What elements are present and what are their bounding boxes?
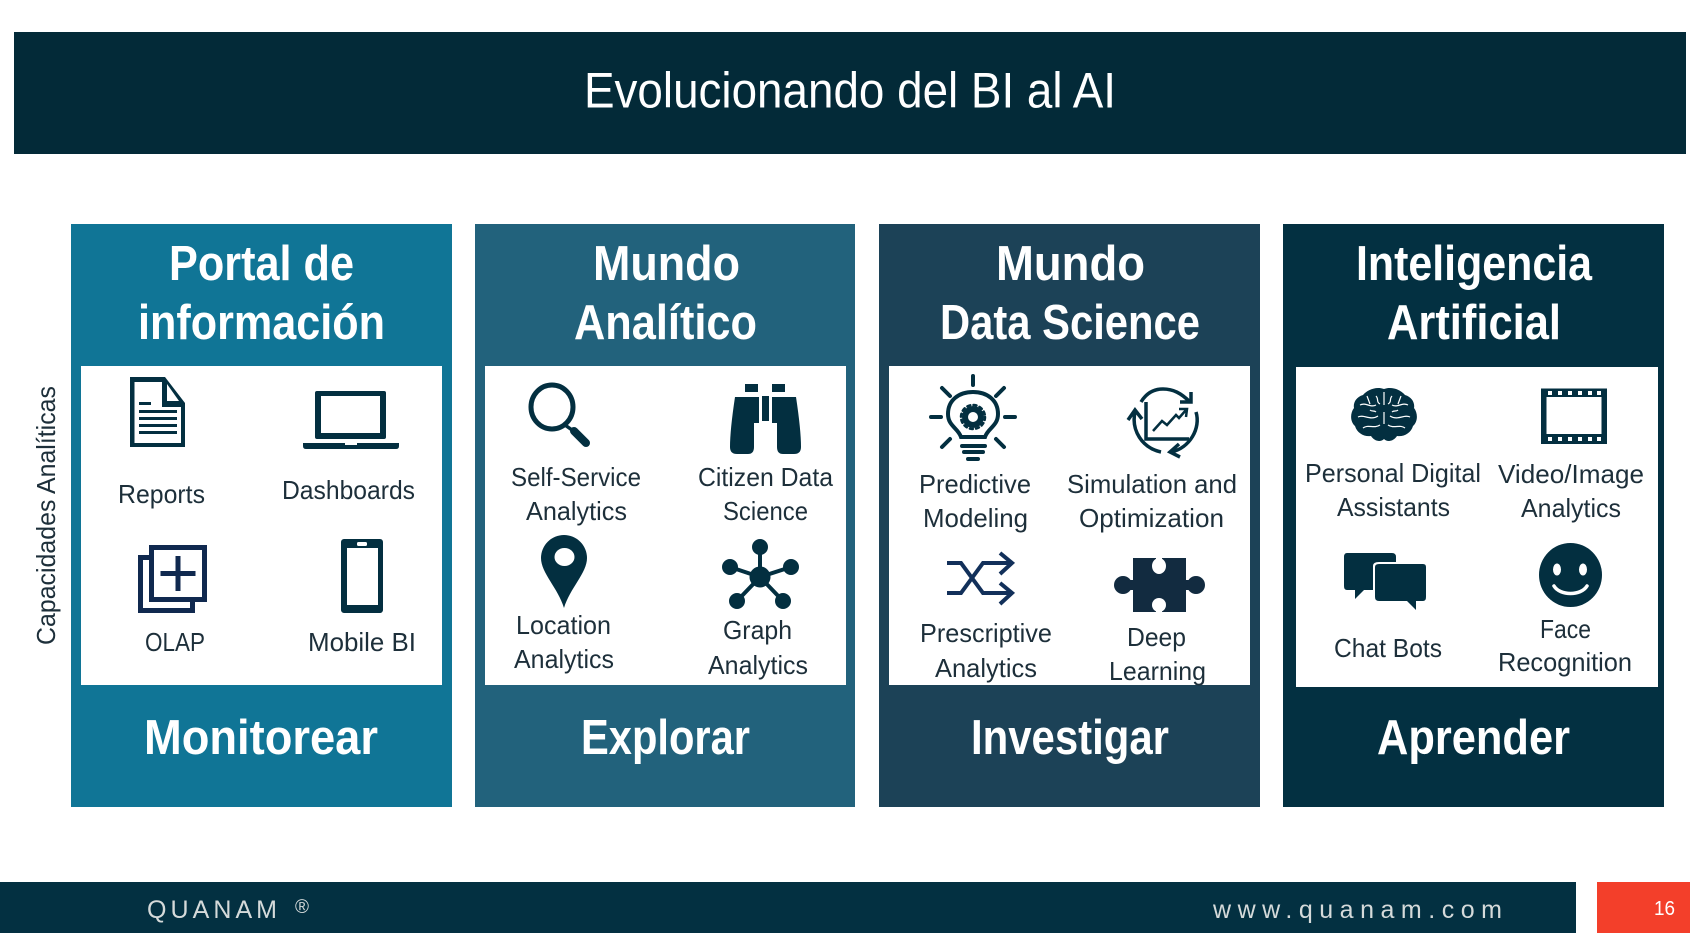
label: Analytics — [935, 653, 1037, 683]
label — [919, 469, 1031, 533]
heading — [574, 237, 757, 350]
label — [698, 462, 834, 526]
icon: chat bubbles — [1344, 553, 1428, 612]
icon: shuffle arrows — [947, 553, 1012, 604]
page number box — [1597, 882, 1690, 933]
heading: Analítico — [574, 296, 757, 350]
icon: laptop — [303, 391, 399, 449]
label: Dashboards — [282, 475, 415, 505]
label: Deep — [1127, 622, 1186, 652]
label: Analytics — [514, 644, 614, 674]
registered mark: ® — [295, 897, 309, 918]
icon: simulation cycle chart — [1128, 389, 1197, 457]
label: Reports — [118, 479, 205, 509]
title banner — [14, 32, 1686, 154]
heading: Inteligencia — [1356, 237, 1593, 291]
heading: Mundo — [593, 237, 740, 291]
heading: Portal de — [169, 237, 354, 291]
label: Citizen Data — [698, 462, 834, 492]
website: www.quanam.com — [1212, 896, 1502, 924]
label: Recognition — [1498, 647, 1632, 677]
label — [1067, 469, 1237, 533]
label: Predictive — [919, 469, 1031, 499]
panel: Inteligencia Artificial — [1283, 224, 1664, 807]
title: Evolucionando del BI al AI — [584, 62, 1116, 118]
label: Modeling — [923, 503, 1028, 533]
label: Personal Digital — [1305, 458, 1481, 488]
heading: Data Science — [940, 296, 1200, 350]
label: Video/Image — [1498, 459, 1644, 489]
label: Science — [723, 496, 808, 526]
label — [920, 618, 1052, 683]
label: Analytics — [526, 496, 627, 526]
label: Assistants — [1337, 492, 1450, 522]
label — [1498, 459, 1644, 523]
white content box — [485, 366, 846, 685]
icon: binoculars — [730, 384, 801, 454]
brand name: QUANAM — [147, 896, 277, 924]
label — [514, 610, 614, 674]
label — [1498, 614, 1632, 677]
icon: lightbulb with gear — [931, 376, 1015, 459]
white content box — [889, 366, 1250, 685]
footer bar — [0, 882, 1576, 933]
footer word: Investigar — [971, 711, 1169, 765]
label: Graph — [723, 615, 792, 645]
heading: Artificial — [1387, 296, 1561, 350]
heading — [138, 237, 385, 350]
icon: magnifier — [531, 385, 586, 443]
side label: Capacidades Analíticas — [31, 386, 61, 645]
icon: puzzle piece — [1114, 556, 1205, 614]
icon: brain — [1351, 388, 1417, 441]
icon: network graph — [722, 540, 798, 608]
heading — [940, 237, 1200, 350]
footer word: Monitorear — [144, 711, 378, 765]
icon: film strip — [1541, 388, 1607, 444]
footer word: Aprender — [1377, 711, 1570, 765]
white content box — [1296, 367, 1658, 687]
label: Face — [1540, 614, 1591, 644]
panel: Portal de información — [71, 224, 452, 807]
icon: smiley face — [1539, 543, 1602, 607]
label: Learning — [1109, 656, 1206, 686]
label: Analytics — [708, 650, 808, 680]
label — [708, 615, 808, 680]
panel: Mundo Analítico — [475, 224, 855, 807]
white content box — [81, 366, 442, 685]
heading: información — [138, 296, 385, 350]
label — [511, 462, 641, 526]
label: Prescriptive — [920, 618, 1052, 648]
label — [1305, 458, 1481, 522]
icon: OLAP cube sheets — [138, 545, 207, 613]
label: Location — [516, 610, 611, 640]
footer word: Explorar — [581, 711, 750, 765]
icon: report document — [130, 377, 185, 447]
label: Mobile BI — [308, 627, 416, 657]
label: OLAP — [145, 627, 205, 657]
icon: location pin — [541, 535, 587, 608]
label: Analytics — [1521, 493, 1621, 523]
heading — [1356, 237, 1593, 350]
label: Chat Bots — [1334, 633, 1442, 663]
label: Self-Service — [511, 462, 641, 492]
label: Simulation and — [1067, 469, 1237, 499]
page number: 16 — [1654, 898, 1675, 920]
panel: Mundo Data Science — [879, 224, 1260, 807]
label — [1109, 622, 1206, 686]
heading: Mundo — [996, 237, 1145, 291]
label: Optimization — [1079, 503, 1224, 533]
icon: mobile phone — [341, 539, 383, 613]
